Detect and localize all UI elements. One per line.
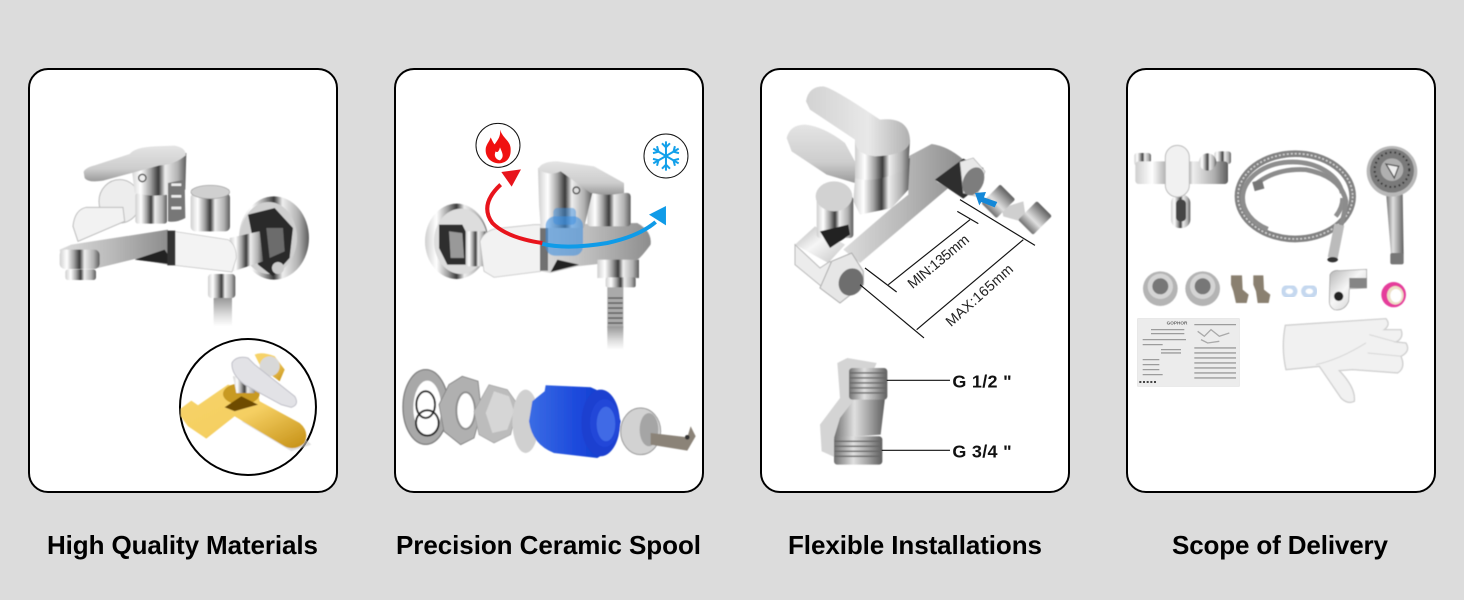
image: faucet top view [787, 86, 989, 303]
image: instruction sheet [1138, 319, 1239, 386]
image: adapter fitting [820, 358, 887, 465]
dimension: MAX 165mm: MAX:165mm [943, 262, 1017, 330]
icon: snowflake [644, 134, 688, 178]
label: G 1/2 inch: G 1/2 " [952, 371, 1012, 391]
image: faucet with cartridge [425, 161, 651, 350]
label: G 3/4 inch [882, 441, 1012, 461]
image: PTFE tape roll [1381, 282, 1406, 307]
panel: precision ceramic spool [395, 69, 703, 560]
icon: flame [476, 123, 520, 167]
image: wall bracket [1329, 269, 1367, 310]
dimension: MIN 135mm: MIN:135mm [905, 232, 973, 292]
image: chrome bath faucet [60, 146, 309, 326]
caption: precision ceramic spool: Precision Ceramic Spool [396, 530, 701, 560]
label: G 1/2 inch [887, 371, 1012, 391]
caption: flexible installations: Flexible Installations [788, 530, 1042, 560]
image: instruction sheet: GOPHOR [1167, 321, 1188, 326]
image: small adapter with blue arrow [975, 184, 1052, 235]
image: eccentric connectors [1231, 275, 1270, 303]
label: G 3/4 inch: G 3/4 " [952, 441, 1012, 461]
inset: gold faucet detail circle [180, 339, 316, 475]
dimension: MAX 165mm [860, 200, 1035, 338]
image: white gloves [1283, 319, 1408, 402]
image: rubber washers [1283, 286, 1315, 296]
arrow: hot red curve [487, 169, 542, 243]
panel: high quality materials [29, 69, 337, 560]
dimension: MIN 135mm [865, 211, 978, 292]
panel: scope of delivery [1127, 69, 1435, 560]
image: exploded cartridge parts [403, 370, 696, 458]
panel: flexible installations [761, 69, 1069, 560]
image: cover plates [1143, 271, 1220, 306]
image: faucet front view [1134, 145, 1231, 228]
caption: scope of delivery: Scope of Delivery [1172, 530, 1389, 560]
arrow: cold blue curve [542, 206, 666, 247]
image: hand shower [1367, 146, 1417, 264]
image: shower hose [1238, 154, 1353, 262]
caption: high quality materials: High Quality Materials [47, 530, 318, 560]
